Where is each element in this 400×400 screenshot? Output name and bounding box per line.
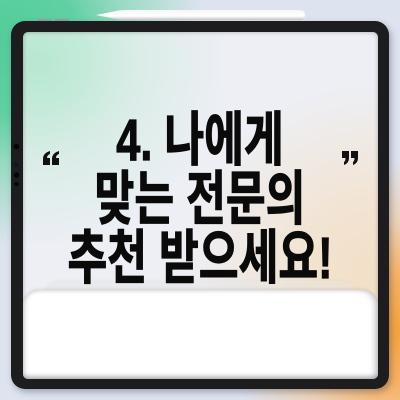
card behind — [45, 281, 357, 321]
title — [67, 107, 333, 290]
white card — [23, 290, 378, 379]
title: 맞는 전문의 — [95, 166, 305, 232]
icon: tablet volume buttons — [37, 19, 69, 21]
icon: camera dots — [14, 144, 20, 186]
icon: stylus pencil — [96, 10, 305, 20]
tablet screen — [23, 32, 378, 379]
opening quote mark — [43, 151, 59, 165]
title: 4. 나에게 — [116, 107, 284, 173]
title: 추천 받으세요! — [67, 225, 333, 290]
closing quote mark — [342, 151, 358, 165]
